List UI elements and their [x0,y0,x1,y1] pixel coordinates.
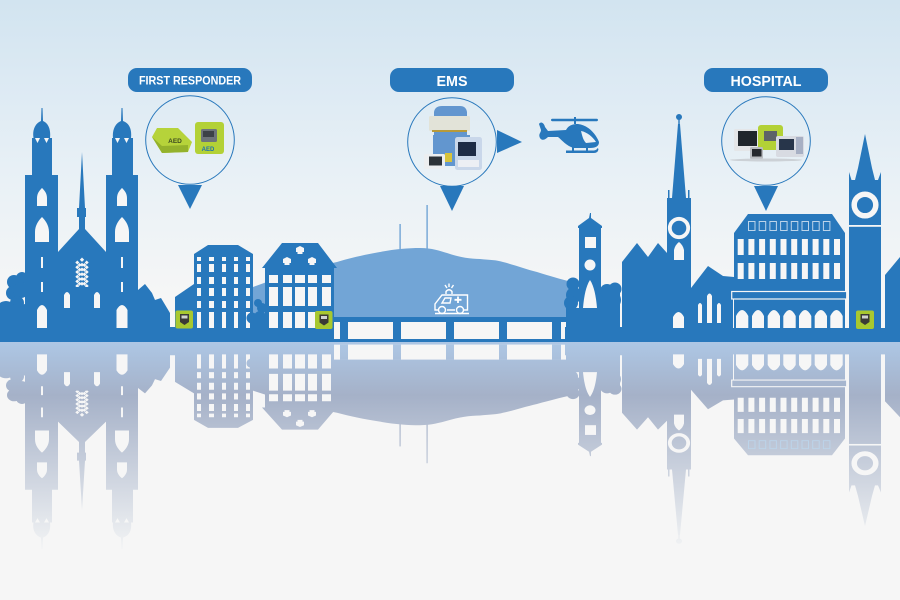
circle: AED devices: AED [168,138,182,145]
callout: EMS [390,68,522,211]
callout: hospital [704,68,828,211]
circle: hospital devices [722,97,810,185]
rose window [75,258,89,287]
circle: AED devices: AED [202,147,215,153]
city skyline silhouette [0,108,900,342]
heading: hospital: HOSPITAL [730,73,802,90]
helicopter icon [539,117,599,153]
AED wall icon: office building [176,310,193,328]
heading: first responder: FIRST RESPONDER [139,73,241,87]
AED wall icon: hospital tower [856,310,874,329]
hill with antennas [253,205,572,322]
circle: EMS devices [408,98,496,186]
office building [175,245,253,330]
ambulance icon [435,284,469,314]
heading: EMS: EMS [436,73,468,90]
arrow down [178,185,202,209]
bridge [334,317,566,342]
gabled house [262,243,337,330]
arrow down [440,186,464,211]
arrow down [754,186,778,211]
water reflection of skyline [0,342,900,549]
heading: EMS [390,68,514,92]
arrow right [497,130,522,153]
tree between buildings [246,299,267,330]
AED wall icon: gabled house [315,311,332,329]
trees left [0,272,34,328]
heading: hospital [704,68,828,92]
hospital clock tower [849,134,881,330]
heading: first responder [128,68,252,92]
far right building [881,257,900,330]
small clock tower and trees [564,213,622,330]
church with spire and houses [622,114,734,330]
callout: first responder [128,68,252,209]
ground band [0,327,900,342]
hospital building [732,214,849,330]
cathedral [25,108,170,330]
circle: AED devices [146,96,234,184]
water reflection of hill [253,360,572,463]
